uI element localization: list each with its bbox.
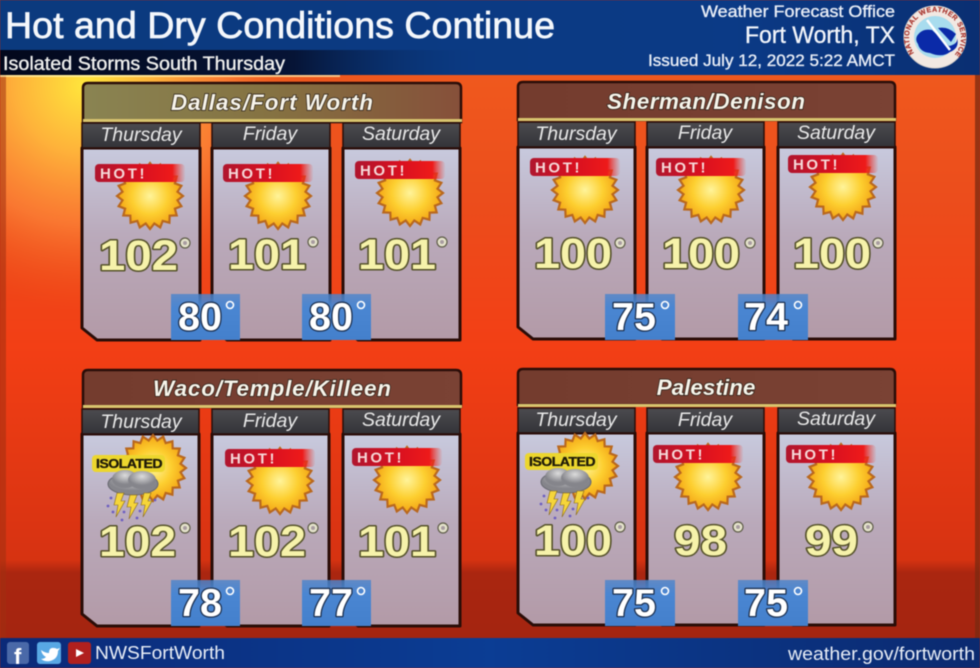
column: Friday: 100: [662, 230, 740, 278]
column: Thursday: 102: [99, 518, 176, 566]
office info: [648, 2, 895, 70]
column: Thursday: 102: [99, 232, 178, 280]
column: Saturday: [778, 122, 895, 339]
social handle: NWSFortWorth: [95, 643, 225, 663]
column: Thursday: Thursday: [535, 409, 618, 431]
column: Thursday: 100: [534, 230, 612, 278]
column: Friday: [647, 408, 764, 625]
heading: Dallas/Fort Worth: [83, 83, 462, 122]
column: Friday: [212, 409, 329, 626]
heading: Sherman/Denison: [518, 82, 896, 121]
column: Saturday: Saturday: [362, 409, 441, 431]
panel: Dallas/Fort Worth: [82, 83, 462, 340]
column: Thursday: Thursday: [100, 411, 183, 433]
column: Thursday: 100: [534, 517, 612, 565]
column: Thursday: [82, 409, 199, 626]
heading: Palestine: Palestine: [657, 375, 755, 400]
column: Saturday: 101: [358, 231, 436, 279]
column: Friday: [212, 123, 330, 340]
column: Saturday: [343, 123, 460, 340]
low: 75: 75: [612, 296, 656, 339]
low: 77: [302, 580, 371, 626]
panel: Waco/Temple/Killeen: [82, 370, 462, 626]
office info: Weather Forecast Office: [701, 2, 895, 21]
column: Friday: Friday: [678, 122, 733, 144]
office info: Fort Worth, TX: [745, 22, 895, 49]
column: Saturday: 100: [793, 230, 871, 278]
low: 78: [171, 580, 240, 626]
website: weather.gov/fortworth: [787, 644, 975, 664]
column: Thursday: ISOLATED: [96, 457, 163, 471]
column: Friday: [647, 122, 764, 339]
column: Friday: Friday: [243, 123, 298, 145]
column: Saturday: [778, 408, 895, 625]
column: Saturday: Saturday: [797, 408, 876, 430]
column: Saturday: 99: [805, 517, 858, 565]
footer band: [0, 638, 980, 668]
heading: Dallas/Fort Worth: Dallas/Fort Worth: [171, 90, 373, 115]
low: 75: 75: [612, 582, 656, 625]
low: 75: [605, 580, 675, 626]
icon: Twitter: [37, 642, 61, 664]
low: 80: [171, 294, 240, 340]
icon: NWS logo: NATIONAL WEATHER SERVICE: [903, 6, 967, 58]
panel: Sherman/Denison: [518, 82, 896, 340]
icon: YouTube: [68, 642, 91, 664]
column: Friday: 102: [228, 518, 306, 566]
column: Thursday: ISOLATED: [529, 455, 596, 469]
low: 78: 78: [178, 582, 222, 625]
low: 75: 75: [744, 582, 788, 625]
column: Saturday: Saturday: [362, 123, 441, 145]
column: Thursday: [82, 123, 200, 340]
column: Friday: 98: [674, 517, 727, 565]
column: Saturday: Saturday: [797, 122, 876, 144]
low: 77: 77: [309, 582, 353, 625]
icon: Facebook: [7, 642, 29, 668]
low: 80: 80: [178, 296, 222, 339]
low: 80: 80: [309, 296, 353, 339]
column: Friday: Friday: [243, 410, 298, 432]
subtitle: Isolated Storms South Thursday: [3, 54, 286, 75]
low: 75: [738, 580, 808, 626]
column: Thursday: [518, 408, 635, 625]
header band: [0, 0, 980, 77]
heading: Sherman/Denison: Sherman/Denison: [607, 89, 805, 114]
column: Saturday: 101: [358, 518, 436, 566]
low: 74: 74: [744, 296, 788, 339]
column: Thursday: [518, 122, 635, 339]
column: Thursday: Thursday: [535, 123, 618, 145]
column: Friday: Friday: [678, 409, 733, 431]
office info: Issued July 12, 2022 5:22 AMCT: [648, 52, 895, 70]
column: Saturday: [343, 409, 460, 626]
panel: Palestine: [518, 369, 896, 626]
low: 80: [302, 294, 371, 340]
low: 75: [605, 294, 675, 340]
title: Hot and Dry Conditions Continue: [5, 5, 555, 46]
heading: Waco/Temple/Killeen: [83, 370, 462, 408]
column: Friday: 101: [228, 231, 306, 279]
heading: Palestine: [518, 369, 896, 407]
heading: Waco/Temple/Killeen: Waco/Temple/Killeen: [153, 376, 391, 401]
low: 74: [738, 294, 808, 340]
column: Thursday: Thursday: [100, 124, 183, 146]
